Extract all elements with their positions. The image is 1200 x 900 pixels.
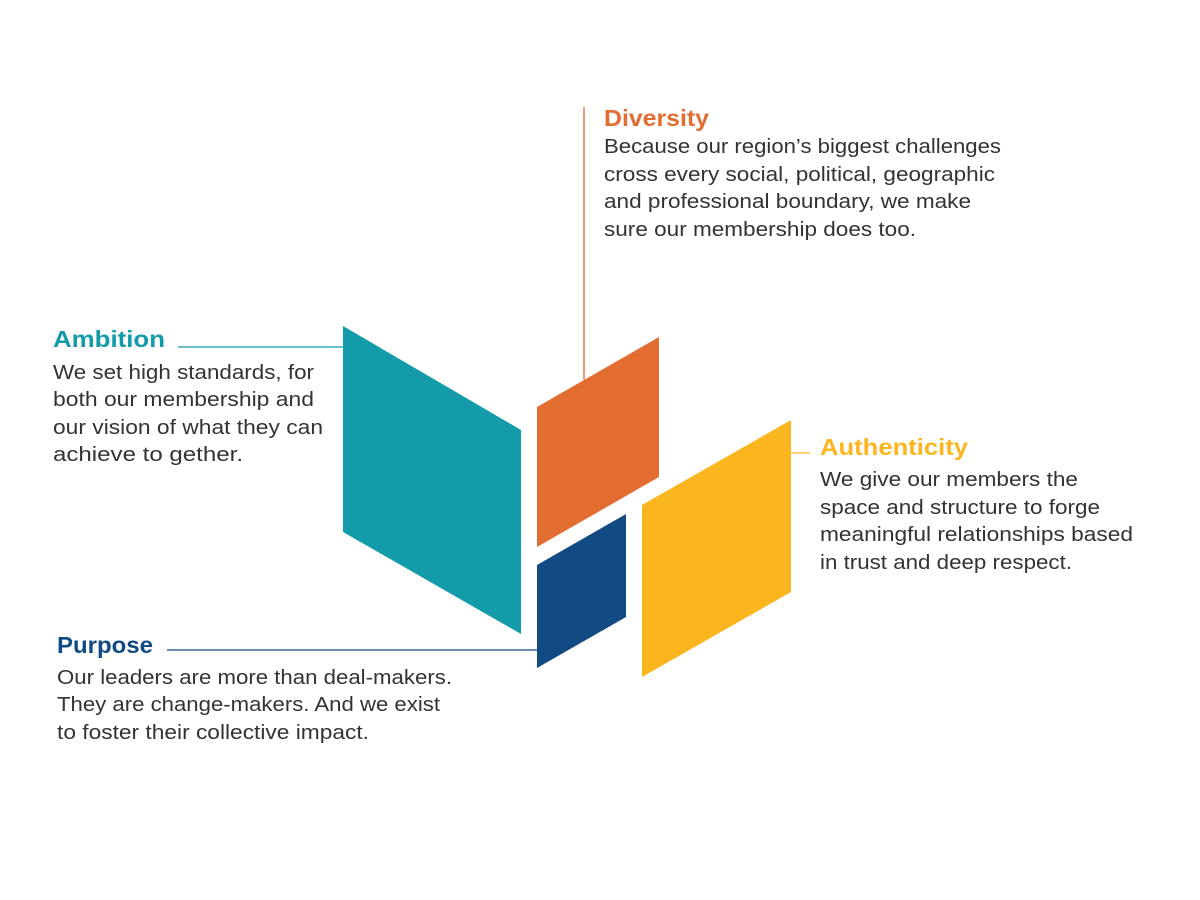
text block: diversity: and professional boundary, we make xyxy=(604,191,971,213)
shape: navy purpose panel xyxy=(537,514,626,668)
text block: diversity xyxy=(604,105,1001,241)
text block: purpose: to foster their collective impact. xyxy=(57,722,369,744)
text block: ambition: Ambition xyxy=(53,326,165,352)
text block: ambition xyxy=(53,326,323,466)
text block: diversity: sure our membership does too. xyxy=(604,219,916,241)
leader line: diversity xyxy=(583,107,585,380)
leader line: purpose xyxy=(167,649,537,651)
text block: purpose: Our leaders are more than deal-makers. xyxy=(57,667,452,689)
text block: authenticity: Authenticity xyxy=(820,434,968,460)
text block: diversity: cross every social, political, geographic xyxy=(604,164,995,186)
shape: yellow authenticity panel xyxy=(642,420,791,677)
text block: ambition: achieve to gether. xyxy=(53,444,243,466)
text block: ambition: We set high standards, for xyxy=(53,362,314,384)
text block: purpose: They are change-makers. And we exist xyxy=(57,694,440,716)
text block: ambition: both our membership and xyxy=(53,389,314,411)
leader line: authenticity xyxy=(791,452,810,454)
text block: diversity: Because our region’s biggest challenges xyxy=(604,136,1001,158)
text block: authenticity: space and structure to forge xyxy=(820,497,1100,519)
shape: orange diversity panel xyxy=(537,337,659,547)
text block: authenticity: in trust and deep respect. xyxy=(820,552,1072,574)
text block: authenticity xyxy=(820,434,1133,574)
text block: authenticity: meaningful relationships based xyxy=(820,524,1133,546)
text block: ambition: our vision of what they can xyxy=(53,417,323,439)
text block: purpose: Purpose xyxy=(57,632,153,658)
text block: authenticity: We give our members the xyxy=(820,469,1078,491)
text block: diversity: Diversity xyxy=(604,105,709,131)
text block: purpose xyxy=(57,632,452,744)
leader line: ambition xyxy=(178,346,343,348)
shape: teal ambition panel xyxy=(343,326,521,634)
